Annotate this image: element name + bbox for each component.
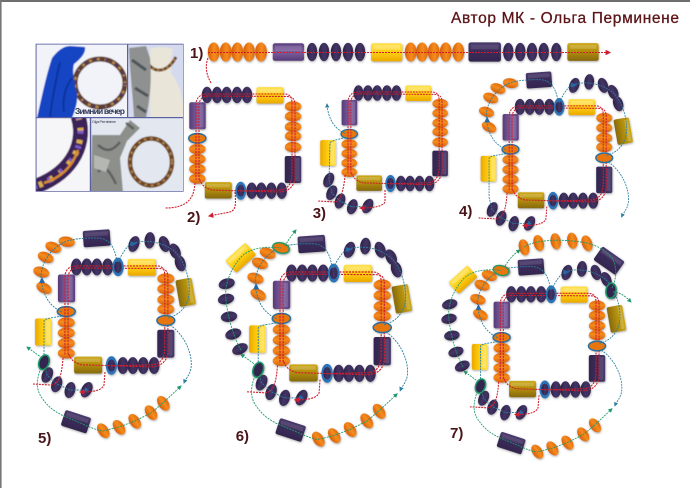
photo: grey scarf with necklace [91,118,184,192]
photo: blue scarf with necklace [36,44,128,118]
step 6 label: 6) [236,428,249,445]
title: Автор МК - Ольга Перминене [451,10,679,27]
step 7: finished bead square with all loops [440,232,631,461]
step 6: bead square with added left loop [217,230,412,449]
photo collage [34,44,184,192]
step 4 label: 4) [459,203,472,220]
step 4: bead square with upper loop [478,71,633,233]
step 1: bead strand [208,42,610,62]
step 5 label: 5) [38,430,51,447]
photo caption: Зимний вечер [75,106,125,116]
step 3: bead square [318,85,448,216]
step 1 label: 1) [190,45,203,62]
photo: braided rope close-up [34,116,90,192]
step 3 label: 3) [313,205,326,222]
step 5: bead square with lower loop [27,229,196,440]
step 2: bead square [165,58,301,216]
step 2 label: 2) [187,209,200,226]
photo credit: Olga Perminiene [92,119,117,124]
step 7 label: 7) [450,425,463,442]
photo: bust with necklace [128,44,184,118]
